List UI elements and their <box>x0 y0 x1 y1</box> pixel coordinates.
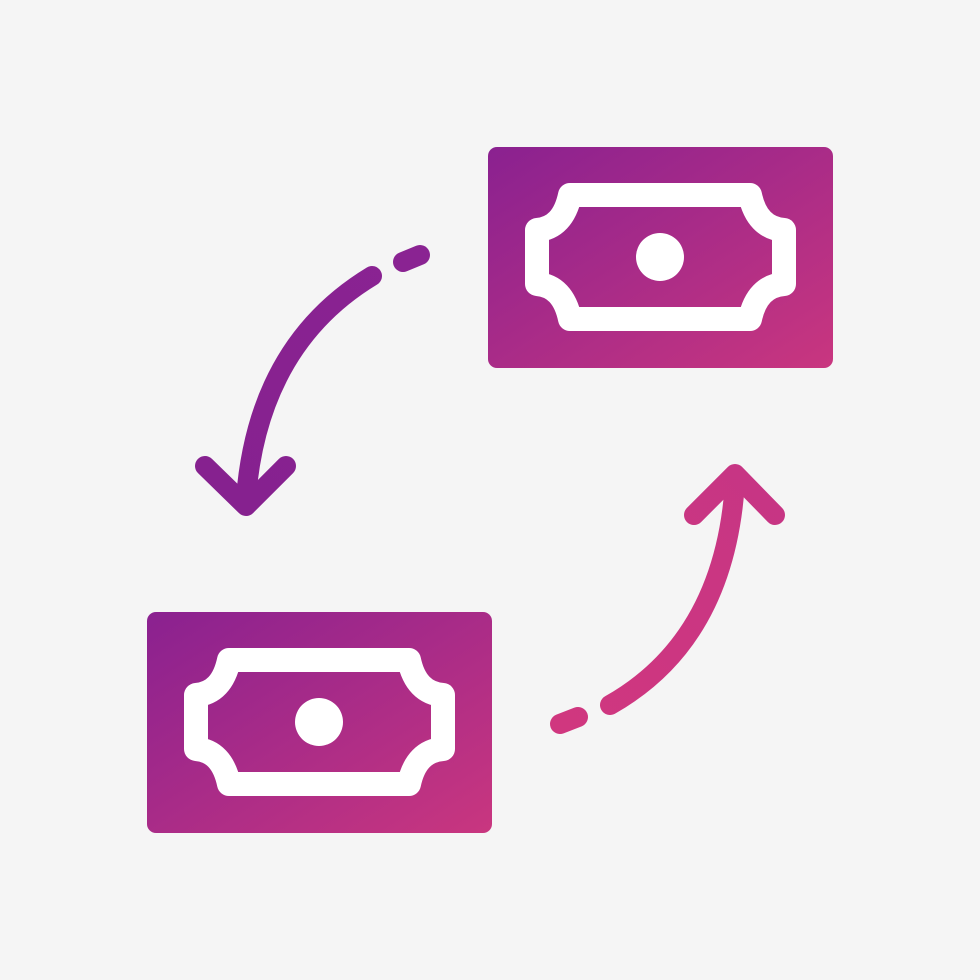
banknote: bottom left <box>147 612 492 833</box>
arrow: top-left curved arrow down <box>205 255 420 506</box>
arrow: bottom-right curved arrow up <box>560 474 775 724</box>
banknote: top right <box>488 147 833 368</box>
